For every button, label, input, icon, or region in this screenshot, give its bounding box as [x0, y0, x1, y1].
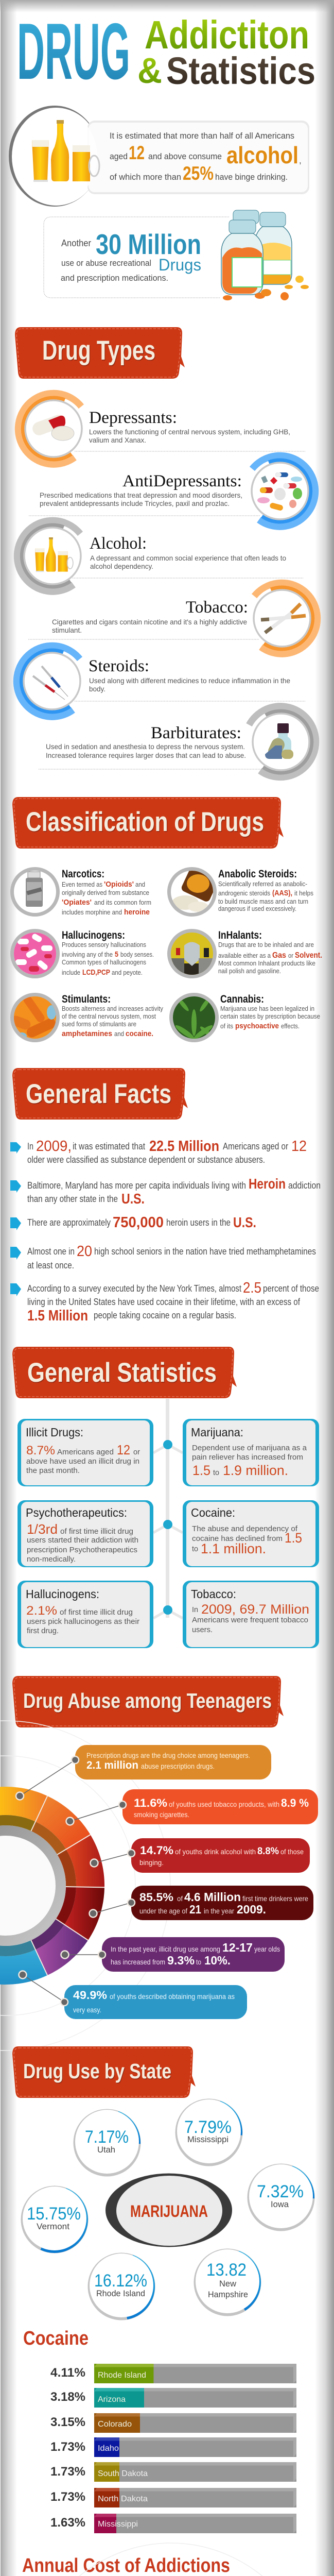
callout: illicit drug use: In the past year, illicit drug use among: [111, 1945, 220, 1953]
text: alcohol statistic: and above consume: [148, 151, 222, 161]
icon: orange ring with cigarettes: [254, 583, 318, 654]
heading: General Facts: [12, 1068, 188, 1120]
bubble: Iowa: 7.32%: [257, 2182, 304, 2201]
icon: grey ring with bottle and capsules: [249, 706, 316, 777]
text: alcohol statistic: aged: [110, 151, 128, 161]
classification: narcotics: [10, 867, 151, 917]
stat card: illicit drugs: or: [133, 1448, 140, 1456]
icon: spilled pill bottle photo: [167, 867, 219, 917]
bubble: New Hampshire: Hampshire: [208, 2290, 248, 2299]
stat card: tobacco: 2009, 69.7 Million: [201, 1602, 309, 1617]
stat card: hallucinogens: Hallucinogens:: [26, 1587, 99, 1601]
text: alcohol statistic: [110, 131, 302, 184]
bubble: Mississippi: 7.79%: [184, 2117, 232, 2137]
stat card: marijuana: to: [213, 1468, 219, 1477]
bar: Idaho: Idaho: [98, 2444, 119, 2453]
panel: recreational drugs: [44, 210, 309, 300]
fact: cocaine survey: [10, 1280, 319, 1324]
text: stimulants description: amphetamines: [62, 1029, 112, 1038]
heading: General Statistics: General Statistics: [27, 1358, 217, 1388]
drug type: depressants: Depressants:: [89, 409, 177, 427]
fact: 750,000 users: heroin users in the: [166, 1217, 231, 1228]
bubble: New Hampshire: 13.82: [206, 2260, 247, 2280]
drug type: depressants: [18, 393, 305, 464]
text: 30 million: Another: [61, 238, 91, 248]
icon: orange pills photo: [9, 993, 60, 1042]
icon: beer bottle and glasses: [32, 120, 99, 182]
fact: Baltimore heroin: [10, 1176, 321, 1207]
callout: alcohol: of those: [280, 1848, 304, 1856]
stat card: illicit drugs: Illicit Drugs:: [26, 1426, 83, 1439]
timeline dots: [163, 1440, 172, 1615]
callout: illicit drug use: has increased from: [111, 1958, 165, 1966]
callout: illicit drug use: to: [196, 1958, 201, 1966]
stat card: psychotherapeutics: Psychotherapeutics:: [26, 1506, 127, 1519]
icon: cannabis leaf photo: [169, 993, 219, 1042]
bubble: Iowa: Iowa: [271, 2199, 289, 2209]
text: stimulants description: cocaine.: [126, 1029, 153, 1038]
text: narcotics description: Even termed as: [62, 880, 102, 888]
fact: cocaine survey: 2.5: [243, 1280, 261, 1296]
heading: Drug Types: [15, 327, 185, 379]
stat card: psychotherapeutics: users started their addiction with: [27, 1536, 138, 1545]
text: hallucinogens description: Common types of hallucinogens: [62, 958, 146, 966]
stat card: illicit drugs: Americans aged: [57, 1448, 114, 1456]
bar: Arizona: 3.18%: [50, 2390, 85, 2404]
heading: Drug Types: Drug Types: [42, 335, 155, 366]
fact: 22.5 million: 2009,: [36, 1138, 72, 1155]
fact: Baltimore heroin: Baltimore, Maryland has more per capita individuals living with: [27, 1180, 246, 1191]
heading: Classification of Drugs: Classification of Drugs: [26, 807, 264, 837]
fact: 750,000 users: 750,000: [113, 1214, 164, 1231]
callout: first time drinkers: first time drinkers were: [242, 1894, 308, 1903]
text: tobacco description: Cigarettes and cigars contain nicotine and it's a highly addictive: [52, 618, 247, 626]
callout: illicit drug use: 9.3%: [167, 1954, 195, 1967]
bar: Colorado: Colorado: [98, 2420, 132, 2429]
heading: Drug Abuse among Teenagers: Drug Abuse among Teenagers: [23, 1689, 272, 1713]
stat card: tobacco: Americans were frequent tobacco: [192, 1616, 308, 1624]
text: cannabis description: of its: [220, 1022, 233, 1030]
text: hallucinogens description: [62, 941, 154, 977]
text: inhalants description: nail polish and gasoline.: [218, 967, 281, 975]
bubble: Iowa: [247, 2164, 315, 2231]
bubble: Vermont: Vermont: [37, 2222, 69, 2231]
text: inhalants description: Most common Inhalant products like: [218, 959, 315, 967]
callout: first time drinkers: of: [177, 1894, 183, 1903]
bar: Colorado: [50, 2413, 296, 2433]
drug type: alcohol: Alcohol:: [90, 534, 147, 553]
classification: inhalants: InHalants:: [218, 929, 262, 941]
icon: arrow bullet: [10, 1217, 21, 1230]
text: cannabis description: psychoactive: [235, 1022, 279, 1030]
heading: Cocaine: Cocaine: [23, 2328, 89, 2349]
bubble: Utah: [73, 2109, 141, 2176]
stat card: tobacco: users.: [192, 1625, 213, 1634]
text: 30 million: 30 Million: [96, 228, 201, 260]
text: tobacco description: stimulant.: [52, 626, 82, 634]
text: narcotics description: heroine: [124, 908, 150, 917]
drug type: barbiturates: Barbiturates:: [151, 724, 241, 742]
stat card: cocaine: cocaine has declined from: [192, 1534, 283, 1543]
callout: marijuana: [19, 1971, 247, 2019]
callout: first time drinkers: under the age of: [139, 1907, 187, 1915]
text: alcohol description: [90, 554, 286, 570]
text: hallucinogens description: and peyote.: [112, 969, 143, 976]
stat card: marijuana: Marijuana:: [191, 1426, 243, 1439]
callout: tobacco: [66, 1789, 318, 1825]
drug type: steroids: [16, 646, 305, 717]
fact: cocaine survey: According to a survey executed by the New York Times, almost: [27, 1283, 241, 1294]
stat card: cocaine: 1.1 million.: [201, 1541, 266, 1556]
text: stimulants description: [62, 1005, 163, 1038]
stat card: cocaine: The abuse and dependency of: [192, 1524, 298, 1533]
bar: Idaho: [50, 2437, 296, 2457]
text: inhalants description: Solvent.: [295, 951, 322, 960]
bar: North Dakota: 1.73%: [50, 2490, 85, 2504]
fact: 750,000 users: [10, 1214, 256, 1231]
text: alcohol description: A depressant and common social experience that often leads to: [90, 554, 286, 562]
fact: Baltimore heroin: addiction: [288, 1180, 321, 1191]
stat card: hallucinogens: first drug.: [27, 1626, 59, 1635]
stat card: illicit drugs: 12: [117, 1442, 130, 1458]
stat card: tobacco: In: [192, 1605, 198, 1614]
stat card: psychotherapeutics: prescription Psychotherapeutics: [27, 1546, 137, 1554]
icon: heroin bottle photo: [10, 867, 60, 917]
icon: grey ring with beers: [17, 520, 81, 591]
bubble: Utah: 7.17%: [85, 2127, 129, 2147]
classification: hallucinogens: Hallucinogens:: [62, 929, 125, 941]
callout: first time drinkers: in the year: [204, 1907, 234, 1915]
text: hallucinogens description: LCD,PCP: [82, 968, 110, 977]
callout: first time drinkers: 2009.: [237, 1903, 266, 1916]
stat card: marijuana: 1.5: [192, 1463, 210, 1478]
callout: alcohol: 8.8%: [257, 1846, 279, 1857]
classification: cannabis: [169, 993, 320, 1042]
text: inhalants description: or: [288, 952, 294, 959]
fact: cocaine survey: percent of those: [263, 1283, 319, 1294]
drug type: steroids: Steroids:: [89, 657, 149, 675]
bar: South Dakota: [50, 2462, 296, 2482]
bubble: Mississippi: Mississippi: [187, 2134, 228, 2144]
bubble: Rhode Island: [87, 2252, 155, 2320]
heading: Classification of Drugs: [12, 797, 284, 849]
text: anabolic steroids description: androgenic steroids: [218, 889, 270, 897]
fact: 22.5 million: it was estimated that: [73, 1141, 145, 1151]
chart: teen drug abuse donut: [0, 1787, 104, 1985]
fact: 22.5 million: 22.5 Million: [149, 1138, 219, 1155]
text: stimulants description: Boosts alterness and increases activity: [62, 1005, 163, 1012]
callout: first time drinkers: [90, 1886, 313, 1920]
classification: cannabis: Cannabis:: [220, 993, 264, 1005]
icon: orange ring with capsule: [18, 393, 82, 464]
title: &: [137, 50, 162, 91]
text: antidepressants description: Prescribed medications that treat depression and mood disorders,: [40, 491, 242, 499]
callout: prescription drugs: Prescription drugs are the drug choice among teenagers.: [86, 1751, 250, 1759]
callout: prescription drugs: 2.1 million: [86, 1759, 138, 1771]
text: narcotics description: and its common form: [94, 899, 151, 906]
text: narcotics description: originally derived from substance: [62, 889, 149, 896]
text: inhalants description: available either as a: [218, 952, 271, 959]
heading: Drug Use by State: Drug Use by State: [23, 2059, 171, 2083]
text: antidepressants description: prevalent antidepressants include Tricycles, paxil and prozlac.: [40, 499, 230, 507]
callout: marijuana: 49.9%: [73, 1989, 107, 2002]
bar chart: cocaine by state: [50, 2364, 296, 2533]
callout: tobacco: 11.6%: [134, 1797, 167, 1809]
text: inhalants description: Drugs that are to be inhaled and are: [218, 941, 314, 948]
text: narcotics description: and: [135, 880, 145, 888]
stat card: marijuana: Dependent use of marijuana as a: [192, 1444, 307, 1452]
heading: Annual Cost of Addictions: Annual Cost of Addictions: [22, 2555, 230, 2576]
stat card: illicit drugs: [17, 1419, 153, 1486]
fact: high school seniors: at least once.: [27, 1260, 74, 1270]
classification: inhalants: [167, 929, 322, 978]
text: barbiturates description: Increased tolerance requires larger doses that can lead to abuse.: [46, 751, 246, 759]
bar: Idaho: 1.73%: [50, 2440, 85, 2454]
text: cannabis description: Marijuana use has been legalized in: [220, 1005, 314, 1012]
title: Statistics: [166, 49, 315, 92]
fact: 22.5 million: [10, 1138, 307, 1165]
text: hallucinogens description: Produces sensory hallucinations: [62, 941, 146, 948]
stat card: tobacco: Tobacco:: [191, 1587, 236, 1601]
fact: 22.5 million: 12: [291, 1138, 307, 1155]
fact: 22.5 million: In: [27, 1141, 33, 1151]
fact: 750,000 users: U.S.: [233, 1214, 256, 1230]
stat card: marijuana: pain reliever has increased from: [192, 1453, 303, 1462]
stat card: illicit drugs: 8.7%: [26, 1444, 55, 1458]
callout: prescription drugs: [16, 1745, 271, 1800]
fact: high school seniors: 20: [77, 1243, 92, 1260]
icon: arrow bullet: [10, 1247, 21, 1260]
bar: Rhode Island: Rhode Island: [98, 2371, 146, 2380]
drug type: barbiturates: [39, 706, 316, 777]
text: alcohol statistic: of which more than: [110, 172, 181, 182]
stat card: psychotherapeutics: [17, 1500, 153, 1567]
icon: blue ring with mixed pills: [252, 455, 315, 527]
text: alcohol statistic: alcohol: [226, 142, 298, 168]
stat card: illicit drugs: the past month.: [26, 1466, 80, 1475]
icon: arrow bullet: [10, 1283, 21, 1296]
text: hallucinogens description: body senses.: [120, 951, 154, 958]
fact: Baltimore heroin: Heroin: [249, 1176, 286, 1192]
callout: illicit drug use: year olds: [254, 1945, 280, 1953]
text: 30 million: use or abuse recreational: [61, 258, 151, 268]
bar: Colorado: 3.15%: [50, 2415, 85, 2429]
callout: first time drinkers: 85.5%: [139, 1891, 173, 1904]
stat card: cocaine: to: [192, 1545, 198, 1553]
bar: Rhode Island: 4.11%: [50, 2366, 85, 2380]
text: hallucinogens description: 5: [115, 950, 118, 959]
fact: high school seniors: Almost one in: [27, 1246, 75, 1257]
stat card: cocaine: [183, 1500, 319, 1567]
bar: South Dakota: South Dakota: [98, 2469, 148, 2478]
text: cannabis description: certain states by prescription because: [220, 1012, 320, 1020]
callout: first time drinkers: 4.6 Million: [184, 1890, 241, 1904]
bar: Mississippi: 1.63%: [50, 2516, 85, 2530]
text: 30 million: Drugs: [159, 256, 201, 274]
bar: Rhode Island: [50, 2364, 296, 2383]
bubble: Mississippi: [175, 2099, 243, 2166]
classification: anabolic steroids: Anabolic Steroids:: [218, 868, 297, 880]
icon: aerosol cans photo: [167, 929, 217, 978]
callout: tobacco: 8.9 %: [281, 1797, 309, 1809]
fact: high school seniors: [10, 1243, 316, 1270]
text: stimulants description: and: [114, 1030, 124, 1038]
bar: Mississippi: [50, 2514, 296, 2533]
text: depressants description: [89, 428, 290, 444]
text: stimulants description: sued forms of stimulants are: [62, 1020, 136, 1028]
stat card: hallucinogens: 2.1%: [26, 1604, 57, 1618]
icon: pink capsules photo: [10, 929, 60, 978]
bar: Arizona: [50, 2388, 296, 2408]
drug type: antidepressants: AntiDepressants:: [122, 472, 242, 490]
bar: North Dakota: North Dakota: [98, 2495, 148, 2503]
drug type: antidepressants: [29, 455, 315, 527]
text: narcotics description: includes morphine and: [62, 908, 122, 916]
text: anabolic steroids description: dangerous if used excessively.: [218, 905, 296, 912]
callout: tobacco: smoking cigarettes.: [134, 1810, 189, 1819]
callout: first time drinkers: 21: [189, 1903, 201, 1916]
text: cannabis description: [220, 1005, 320, 1030]
text: narcotics description: 'Opioids': [104, 880, 134, 889]
text: anabolic steroids description: to build muscle mass and can turn: [218, 897, 308, 905]
center label: marijuana: MARIJUANA: [130, 2202, 208, 2221]
fact: 22.5 million: Americans aged or: [223, 1141, 288, 1151]
heading: General Facts: General Facts: [26, 1079, 171, 1109]
callout: tobacco: of youths used tobacco products, with: [169, 1800, 279, 1808]
callout: illicit drug use: 10%.: [204, 1954, 231, 1967]
stat card: psychotherapeutics: of first time illicit drug: [60, 1527, 133, 1536]
text: steroids description: [89, 676, 290, 693]
icon: arrow bullet: [10, 1142, 21, 1154]
text: narcotics description: [62, 880, 151, 917]
stat card: marijuana: [183, 1419, 319, 1486]
heading: General Statistics: [12, 1347, 237, 1398]
text: alcohol statistic: have binge drinking.: [215, 172, 288, 182]
text: inhalants description: Gas: [272, 951, 286, 960]
text: inhalants description: [218, 941, 322, 975]
callout: marijuana: very easy.: [73, 2006, 101, 2014]
text: barbiturates description: Used in sedation and anesthesia to depress the nervous system.: [46, 742, 245, 751]
bubble: Rhode Island: 16.12%: [94, 2271, 147, 2291]
bubble: Rhode Island: Rhode Island: [96, 2289, 145, 2298]
callout: alcohol: [91, 1838, 310, 1873]
bubble: New Hampshire: New: [219, 2279, 237, 2289]
text: 30 million: and prescription medications.: [61, 273, 168, 283]
text: antidepressants description: [40, 491, 242, 507]
text: depressants description: valium and Xanax.: [89, 436, 146, 444]
text: depressants description: Lowers the functioning of central nervous system, including GHB,: [89, 428, 290, 436]
panel: alcohol intro: [9, 106, 309, 207]
fact: cocaine survey: people taking cocaine on a regular basis.: [94, 1310, 236, 1320]
text: alcohol statistic: 25%: [183, 163, 214, 184]
text: anabolic steroids description: [218, 880, 313, 912]
bubble: New Hampshire: [194, 2248, 261, 2316]
callout: prescription drugs: abuse prescription drugs.: [141, 1762, 215, 1770]
bar: Mississippi: Mississippi: [98, 2520, 138, 2529]
text: alcohol statistic: ,: [299, 156, 302, 165]
text: alcohol description: alcohol dependency.: [90, 562, 153, 570]
fact: 22.5 million: older were classified as substance dependent or substance abusers.: [27, 1155, 265, 1165]
classification: narcotics: Narcotics:: [62, 868, 104, 880]
fact: 750,000 users: There are approximately: [27, 1217, 111, 1228]
bubble: Utah: Utah: [97, 2145, 115, 2155]
text: 30 million: [61, 228, 201, 283]
fact: Baltimore heroin: U.S.: [121, 1191, 145, 1207]
heading: Drug Use by State: [12, 2046, 196, 2098]
stat card: marijuana: 1.9 million.: [223, 1463, 288, 1478]
text: hallucinogens description: include: [62, 969, 80, 976]
stat card: hallucinogens: [17, 1581, 153, 1648]
drug type: tobacco: Tobacco:: [186, 598, 248, 617]
text: tobacco description: [52, 618, 247, 634]
text: anabolic steroids description: it helps: [294, 889, 313, 897]
text: steroids description: Used along with different medicines to reduce inflammation in the: [89, 676, 290, 685]
text: steroids description: body.: [89, 685, 106, 693]
stat card: cocaine: 1.5: [285, 1530, 302, 1546]
center label: marijuana: [106, 2173, 232, 2247]
callout: illicit drug use: 12-17: [222, 1941, 253, 1954]
callout: illicit drug use: [61, 1937, 285, 1972]
bar: Arizona: Arizona: [98, 2395, 126, 2404]
text: alcohol statistic: 12: [129, 142, 145, 163]
icon: arrow bullet: [10, 1180, 21, 1193]
stat card: illicit drugs: above have used an illicit drug in: [26, 1457, 139, 1466]
classification: stimulants: Stimulants:: [62, 993, 111, 1005]
bar: South Dakota: 1.73%: [50, 2465, 85, 2479]
callout: alcohol: binging.: [139, 1858, 164, 1867]
icon: pill bottles: [221, 210, 309, 300]
classification: anabolic steroids: [167, 867, 313, 917]
fact: cocaine survey: 1.5 Million: [27, 1308, 88, 1324]
drug type: alcohol: [17, 520, 303, 591]
text: barbiturates description: [46, 742, 246, 759]
bubble: Vermont: 15.75%: [27, 2204, 81, 2224]
title: DRUG: [17, 7, 130, 96]
text: cannabis description: effects.: [281, 1022, 300, 1030]
stat card: psychotherapeutics: non-medically.: [27, 1555, 76, 1564]
classification: hallucinogens: [10, 929, 154, 978]
callout: alcohol: of youths drink alcohol with: [175, 1848, 256, 1856]
classification: stimulants: [9, 993, 163, 1042]
text: alcohol statistic: It is estimated that more than half of all Americans: [110, 131, 294, 141]
bar: North Dakota: [50, 2488, 296, 2507]
heading: Drug Abuse among Teenagers: [12, 1676, 284, 1727]
drug type: tobacco: [28, 583, 318, 654]
icon: blue ring with syringes: [16, 646, 80, 717]
text: narcotics description: 'Opiates': [62, 898, 92, 907]
text: stimulants description: of the central nervous system, most: [62, 1012, 156, 1020]
stat card: tobacco: [183, 1581, 319, 1648]
stat card: hallucinogens: of first time illicit drug: [60, 1608, 133, 1617]
callout: alcohol: 14.7%: [140, 1844, 173, 1857]
bubble: Vermont: [21, 2185, 89, 2253]
stat card: cocaine: Cocaine:: [191, 1506, 235, 1519]
stat card: psychotherapeutics: 1/3rd: [27, 1521, 58, 1537]
stat card: hallucinogens: users pick hallucinogens as their: [27, 1617, 139, 1626]
text: anabolic steroids description: Scientifically referred as anabolic-: [218, 880, 307, 888]
fact: Baltimore heroin: than any other state in the: [27, 1194, 118, 1204]
text: hallucinogens description: involving any of the: [62, 951, 113, 958]
text: anabolic steroids description: (AAS),: [272, 889, 292, 897]
callout: marijuana: of youths described obtaining marijuana as: [110, 1992, 235, 2001]
